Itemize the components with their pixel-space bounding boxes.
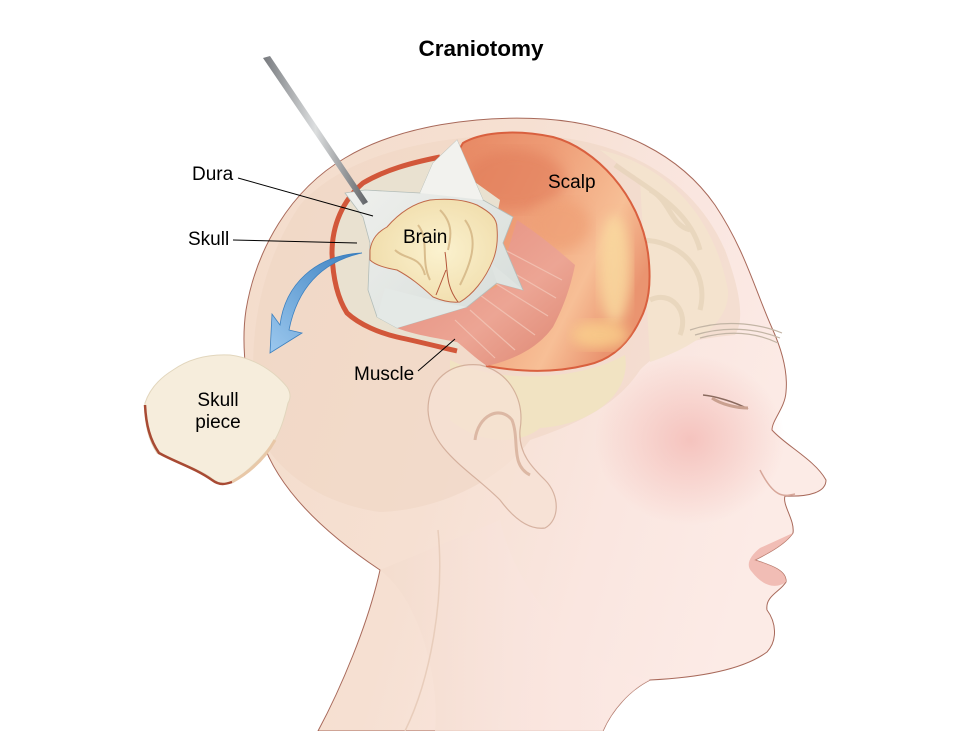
label: Dura: Dura [192,164,234,185]
closed eye [703,395,748,409]
label: Brain: Brain [403,227,447,248]
leader lines [233,178,455,371]
panel: skull opening [332,157,500,351]
ear [428,365,556,528]
translucent skull and brain [253,135,740,512]
label: Muscle: Muscle [354,364,414,385]
dura flaps [345,140,523,328]
label: Skull: Skull [188,229,229,250]
nose and lips [749,470,795,586]
retractor instrument [263,56,368,205]
label: Skull piece: Skull [197,390,239,411]
label: Skull piece: piece [195,412,241,433]
label: Scalp: Scalp [548,172,596,193]
title: Craniotomy [418,36,544,61]
arrow: skull piece removal [270,253,362,353]
panel: scalp flap [460,132,651,372]
eyebrow [690,324,782,343]
head and neck silhouette [244,118,826,731]
skull piece [145,355,290,484]
brain [370,199,497,302]
panel: muscle flap [397,220,575,366]
